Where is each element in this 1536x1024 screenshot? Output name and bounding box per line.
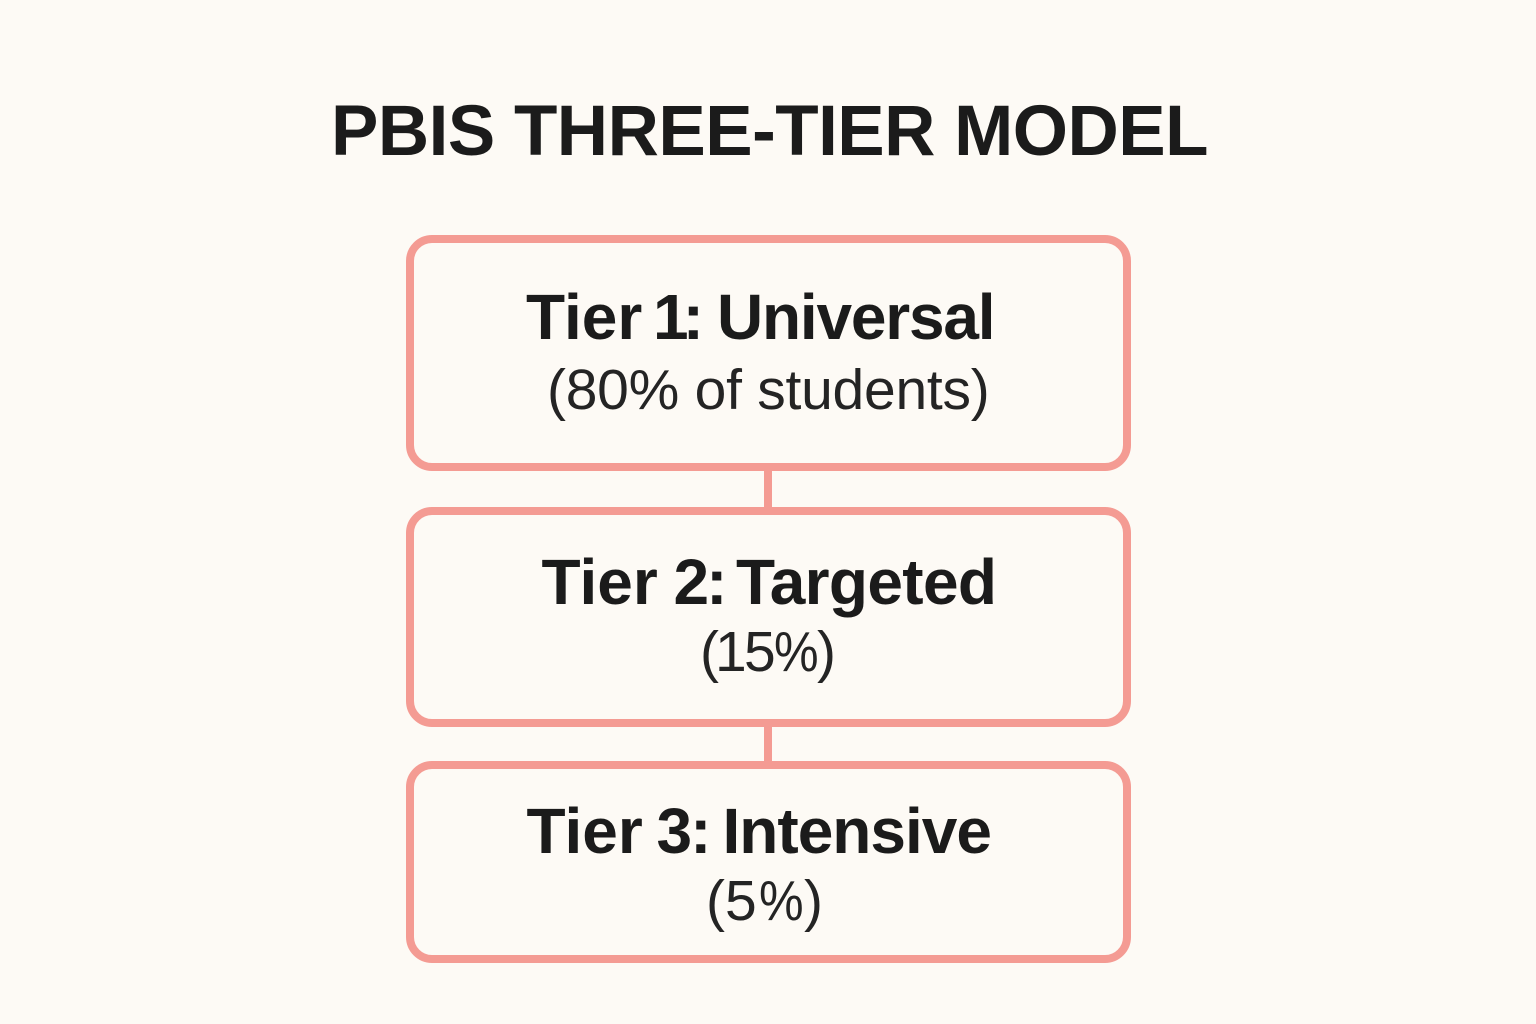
text: tier 3 share: ) — [804, 869, 823, 933]
text: tier 2 share: 1 — [715, 620, 747, 684]
heading: tier 1 — [526, 281, 994, 353]
heading: tier 3: Tier — [526, 795, 643, 867]
heading: tier 2: Tier — [542, 546, 658, 618]
text: tier 3 share: ( — [706, 869, 725, 933]
heading: tier 3: Intensive — [722, 795, 991, 867]
heading: tier 2 — [542, 546, 996, 618]
text: tier 2 share: % — [774, 620, 819, 684]
text: tier 3 share — [706, 869, 823, 933]
heading: tier 1: Universal — [717, 281, 994, 353]
heading: tier 1: 1: — [653, 281, 704, 353]
panel: tier 1 — [406, 235, 1131, 471]
panel: tier 2 — [406, 507, 1131, 727]
connector: tier 1 to tier 2 — [764, 466, 772, 512]
text: tier 2 share — [700, 620, 836, 684]
heading: tier 2: Targeted — [736, 546, 996, 618]
heading: tier 2: 2: — [674, 546, 724, 618]
text: tier 3 share: 5 — [725, 869, 757, 933]
text: tier 2 share: ) — [817, 620, 836, 684]
panel: tier 3 — [406, 761, 1131, 963]
heading: tier 3 — [526, 795, 991, 867]
text: tier 3 share: % — [759, 869, 804, 933]
connector: tier 2 to tier 3 — [764, 722, 772, 766]
title: PBIS THREE-TIER MODEL — [331, 92, 1208, 171]
heading: tier 1: Tier — [526, 281, 642, 353]
heading: tier 3: 3: — [656, 795, 709, 867]
text: tier 2 share: 5 — [744, 620, 776, 684]
text: tier 1 share: (80% of students) — [547, 358, 989, 422]
text: tier 2 share: ( — [700, 620, 719, 684]
